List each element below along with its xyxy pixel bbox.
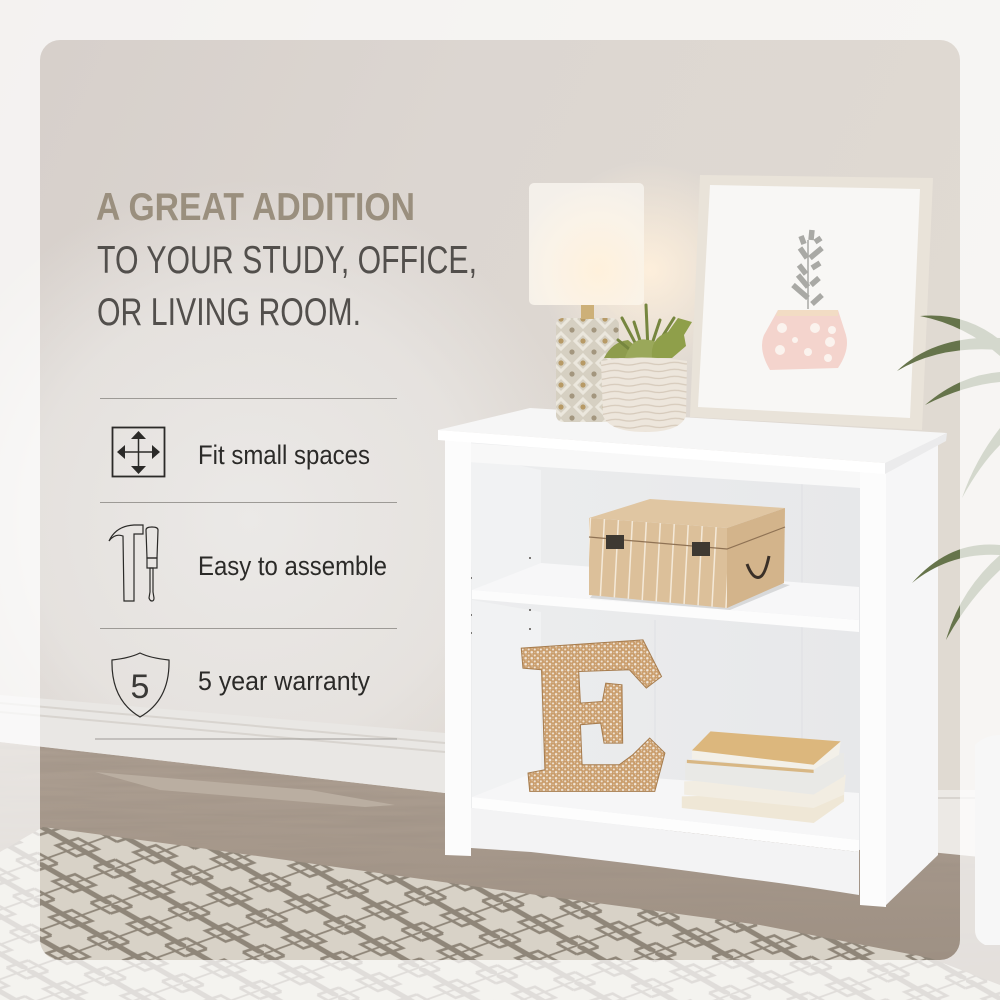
box hinges bbox=[606, 535, 710, 556]
baseboard bbox=[0, 695, 980, 857]
feature: fit small spaces bbox=[112, 428, 370, 476]
feature list bbox=[95, 398, 397, 739]
box shadow bbox=[590, 580, 790, 610]
mat bbox=[698, 185, 920, 418]
ceramic pot bbox=[601, 358, 687, 432]
icon: warranty shield: 5 bbox=[131, 668, 149, 706]
carved letter E bbox=[521, 640, 665, 791]
succulent leaves bbox=[604, 305, 692, 358]
succulent planter bbox=[601, 305, 692, 432]
box front bbox=[589, 518, 727, 608]
plant leaves bbox=[897, 316, 1000, 640]
box right side bbox=[727, 508, 785, 608]
right post bbox=[860, 465, 886, 907]
white bookcase bbox=[438, 408, 947, 907]
wooden box on shelf bbox=[589, 499, 790, 610]
headline bbox=[96, 186, 477, 334]
top board bbox=[438, 408, 947, 474]
interior left side, upper bay bbox=[468, 455, 541, 592]
headline bold line: A GREAT ADDITION bbox=[96, 186, 415, 229]
interior back panel bbox=[468, 440, 860, 850]
framed art print bbox=[690, 175, 933, 430]
kick plate bbox=[471, 808, 859, 895]
label: 5 year warranty bbox=[198, 666, 371, 696]
top rail bbox=[468, 443, 860, 488]
icon: hammer and screwdriver bbox=[109, 525, 158, 601]
right side panel bbox=[884, 436, 938, 907]
left post bbox=[445, 438, 471, 856]
interior left side, lower bay bbox=[472, 600, 541, 798]
feature: easy to assemble bbox=[109, 525, 387, 601]
box handle bbox=[747, 556, 769, 577]
lamp neck bbox=[581, 305, 594, 319]
box lid top bbox=[589, 499, 785, 528]
frame bbox=[690, 175, 933, 430]
headline line two: TO YOUR STUDY, OFFICE, bbox=[97, 239, 477, 282]
pink vase bbox=[762, 310, 847, 370]
potted plant at right edge bbox=[897, 316, 1000, 945]
icon: warranty shield bbox=[112, 653, 169, 717]
lamp base bbox=[556, 318, 619, 422]
plant pot bbox=[975, 735, 1000, 945]
stack of books bbox=[682, 731, 846, 823]
floor bbox=[0, 742, 1000, 1000]
grey sprig bbox=[793, 230, 822, 309]
label: Easy to assemble bbox=[198, 551, 387, 581]
table lamp bbox=[529, 183, 644, 422]
upper shelf bbox=[472, 563, 859, 632]
lower shelf bbox=[472, 770, 859, 852]
patterned rug bbox=[0, 827, 1000, 1000]
headline line three: OR LIVING ROOM. bbox=[97, 291, 361, 334]
icon: move arrows in square bbox=[112, 428, 164, 476]
feature: 5 year warranty bbox=[112, 653, 371, 717]
lamp shade bbox=[529, 183, 644, 305]
label: Fit small spaces bbox=[198, 440, 370, 470]
